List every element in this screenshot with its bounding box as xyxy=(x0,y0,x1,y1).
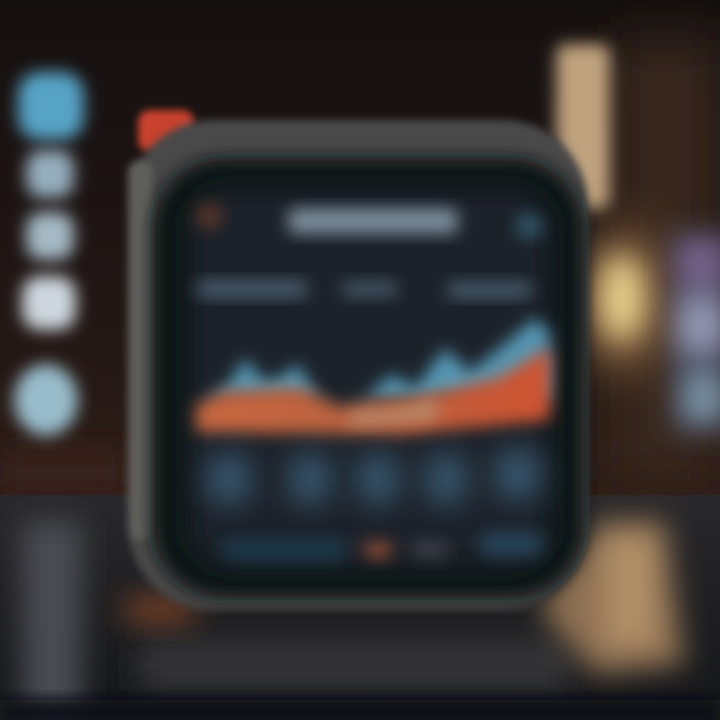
right colourful panel xyxy=(672,232,720,432)
area chart xyxy=(196,318,550,435)
screen subtitle row xyxy=(197,280,532,298)
reflective table surface xyxy=(0,495,720,720)
device screen xyxy=(152,158,584,598)
background wall xyxy=(0,0,720,510)
device body xyxy=(128,120,588,610)
warm table reflection xyxy=(540,520,685,675)
bottom status row xyxy=(222,532,542,560)
device red corner xyxy=(138,110,194,152)
right beige light pillar xyxy=(556,44,610,209)
orange reflection below device xyxy=(120,594,200,626)
left column of glowing blobs xyxy=(14,72,84,436)
orange series xyxy=(196,347,550,435)
blue series xyxy=(205,318,550,402)
screen header: icon, title, icon xyxy=(196,203,542,239)
row of stat tiles xyxy=(208,450,540,503)
pale band xyxy=(350,398,440,425)
yellow glow xyxy=(580,232,664,368)
